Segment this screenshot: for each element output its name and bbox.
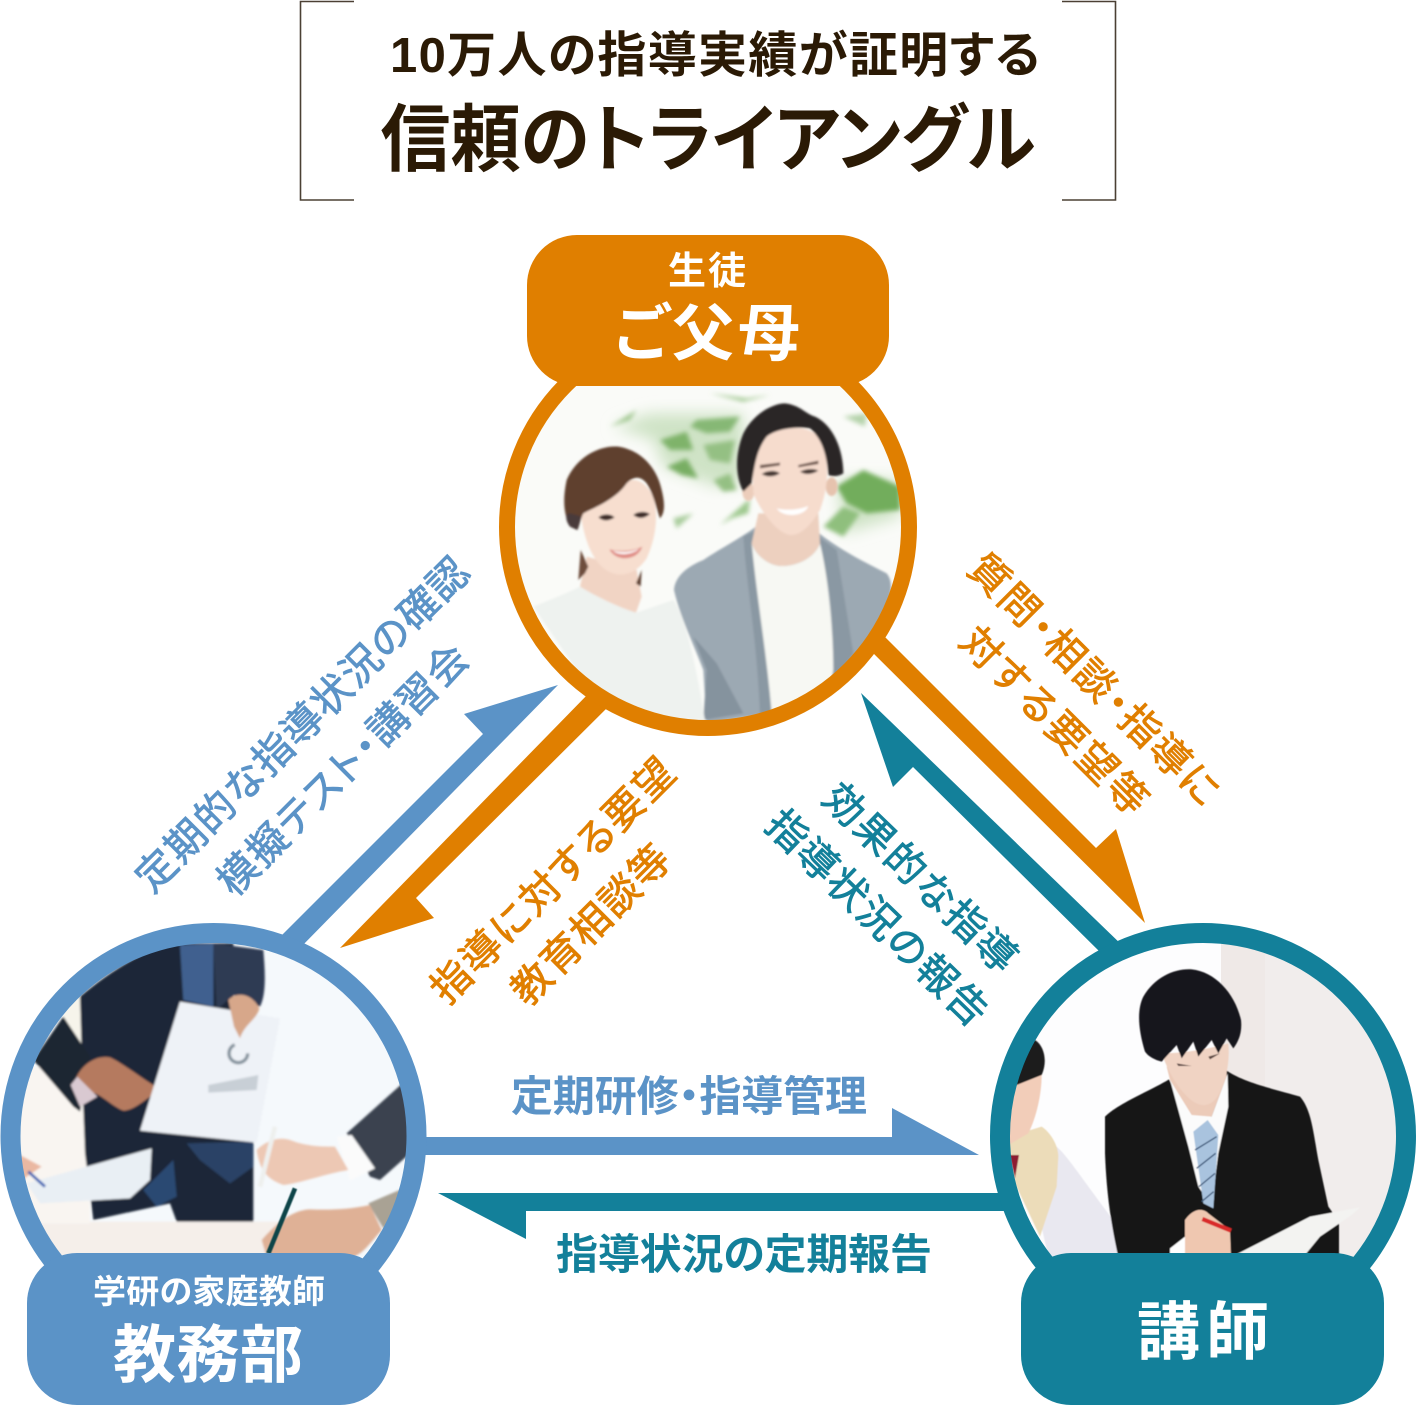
- node: head office circle ring: [10, 933, 416, 1339]
- label: head office: 学研の家庭教師: [93, 1273, 325, 1310]
- instructor tie: [1193, 1120, 1218, 1208]
- message: instructor to head office: 指導状況の定期報告: [556, 1231, 932, 1278]
- label: instructor: 講師: [1137, 1298, 1269, 1368]
- label: parents: 生徒: [668, 251, 746, 293]
- plant foliage detail: [610, 393, 900, 537]
- instructor neck: [1167, 1067, 1227, 1117]
- node: instructor circle ring: [1000, 933, 1406, 1339]
- lower left document: [27, 1148, 152, 1203]
- node: parents circle photo: [533, 389, 901, 720]
- label: instructor: [1021, 1253, 1384, 1405]
- right hand: [257, 1139, 348, 1185]
- student face: [1005, 1075, 1042, 1145]
- man neck: [752, 513, 820, 566]
- pointing hand: [77, 1057, 162, 1111]
- cardigan folds: [693, 637, 743, 720]
- instructor face: [1162, 1043, 1229, 1105]
- node: parents circle ring: [507, 326, 909, 728]
- holding hand: [228, 995, 259, 1038]
- arrow: instructor to parents (teal): [861, 693, 1125, 954]
- arrow: parents to instructor (orange): [870, 636, 1145, 923]
- message: head office to parents: 定期的な指導状況の確認: [128, 550, 478, 901]
- arrow: head office to parents (blue): [278, 685, 558, 948]
- woman back hair: [578, 550, 588, 580]
- left arm: [34, 1016, 84, 1112]
- message: parents to head office: 指導に対する要望: [423, 751, 684, 1012]
- instructor suit: [1105, 1071, 1339, 1257]
- title: [380, 29, 1040, 181]
- man ears: [742, 482, 754, 501]
- left hand: [22, 1154, 42, 1180]
- student shirt: [1042, 1148, 1118, 1256]
- right sleeve: [347, 1077, 410, 1180]
- plant foliage base: [613, 413, 900, 533]
- chart bars: [208, 1075, 258, 1093]
- node: head office circle photo: [20, 943, 406, 1258]
- suit body: [80, 943, 253, 1222]
- woman neck: [580, 557, 642, 613]
- background and table: [42, 1219, 278, 1256]
- node: instructor circle photo: [1010, 944, 1396, 1257]
- woman face: [581, 480, 656, 575]
- chart donut: [229, 1044, 248, 1063]
- woman sweater: [533, 587, 705, 720]
- message: instructor to parents: 指導状況の報告: [757, 802, 996, 1035]
- message: head office to parents: 模擬テスト・講習会: [209, 636, 477, 904]
- message: parents to head office: 教育相談等: [503, 837, 680, 1014]
- title: 信頼のトライアングル: [380, 99, 1036, 181]
- arrow: head office to instructor (blue): [415, 1108, 979, 1155]
- message: head office to instructor: 定期研修・指導管理: [511, 1073, 867, 1120]
- man t-shirt: [752, 543, 833, 713]
- arrow: parents to head office (orange): [340, 692, 612, 948]
- arrow: instructor to head office (teal): [438, 1193, 1015, 1239]
- instructor shirt: [1170, 1073, 1228, 1207]
- woman hair: [564, 447, 664, 530]
- label: parents: ご父母: [614, 300, 800, 369]
- upper sleeve: [213, 943, 265, 1010]
- book: [1235, 1207, 1360, 1255]
- title bracket frame: [300, 2, 1116, 200]
- lower gray sleeve: [368, 1188, 403, 1228]
- man face: [752, 428, 827, 535]
- message: parents to instructor: 質問・相談・指導に: [959, 546, 1228, 815]
- message: instructor to parents: 効果的な指導: [814, 776, 1025, 981]
- label: head office: 教務部: [113, 1321, 303, 1391]
- man hair: [737, 403, 843, 492]
- instructor hand: [1185, 1210, 1231, 1257]
- label: parents: [527, 235, 889, 386]
- message: parents to instructor: 対する要望等: [951, 619, 1156, 824]
- student hair: [1017, 1040, 1046, 1086]
- man cardigan: [674, 526, 891, 723]
- student vest: [1008, 1127, 1058, 1237]
- tie and shirt: [180, 944, 213, 1007]
- lower hand: [262, 1205, 382, 1257]
- instructor hair: [1139, 969, 1241, 1062]
- title: 10万人の指導実績が証明する: [390, 29, 1040, 83]
- trousers highlights: [187, 1142, 253, 1183]
- label: head office: [27, 1253, 390, 1405]
- document: [138, 1000, 255, 1144]
